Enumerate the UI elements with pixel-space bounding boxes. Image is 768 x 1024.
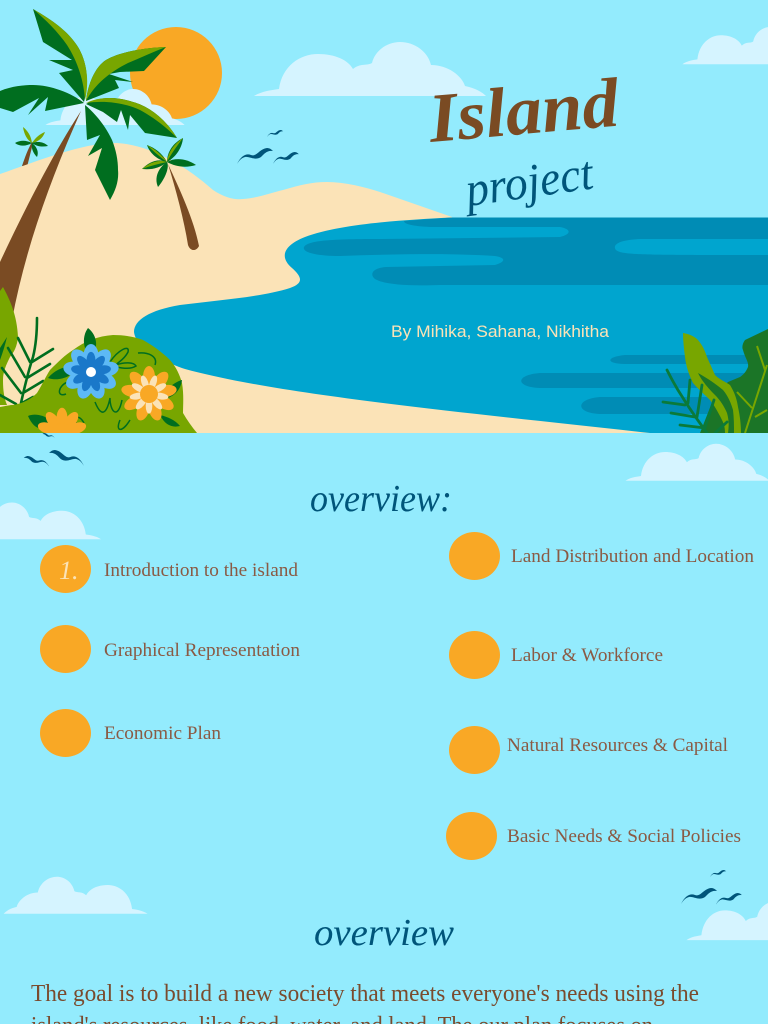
trunk xyxy=(0,111,81,320)
frond: upper right xyxy=(86,47,166,101)
cloud: behind palm xyxy=(45,89,185,125)
paragraph xyxy=(31,981,699,1024)
item 7: Basic Needs & Social Policies xyxy=(507,827,741,847)
item 4: Land Distribution and Location xyxy=(511,547,754,567)
item 1 xyxy=(40,545,299,593)
icon: sun xyxy=(130,27,222,119)
icon: palm tree, back xyxy=(142,138,199,250)
sand xyxy=(0,143,452,300)
water: lower dark strips xyxy=(521,355,768,414)
frond: top xyxy=(33,9,87,102)
cloud: top centre xyxy=(254,42,486,96)
item 3 xyxy=(40,709,221,757)
bush: line doodles xyxy=(59,348,156,429)
item 5: Labor & Workforce xyxy=(511,646,663,666)
plants: right fern xyxy=(663,370,727,433)
list: left column xyxy=(40,545,300,757)
panel: hero beach scene xyxy=(0,9,768,443)
frond: down xyxy=(85,105,118,200)
item 4 xyxy=(449,532,754,580)
frond: left xyxy=(0,85,84,115)
item 1: 1. xyxy=(59,556,78,585)
plants: right leaf inner xyxy=(698,373,734,433)
water: dark bands xyxy=(304,218,768,285)
paragraph: The goal is to build a new society that meets everyone's needs using the xyxy=(31,981,699,1007)
item 2: Graphical Representation xyxy=(104,641,300,661)
title: Island: Island xyxy=(425,65,623,158)
plants: right large leaf xyxy=(700,329,768,433)
small palm: far left xyxy=(15,127,48,167)
water: light strip xyxy=(615,239,768,255)
item 7 xyxy=(446,812,741,860)
plants: right lime leaf xyxy=(683,333,741,433)
plants: left lime leaf xyxy=(0,287,18,405)
authors: By Mihika, Sahana, Nikhitha xyxy=(391,323,610,341)
list: right column xyxy=(446,532,754,860)
heading: overview second: overview xyxy=(314,912,455,954)
cloud: overview right xyxy=(625,444,768,481)
item 6: Natural Resources & Capital xyxy=(507,736,728,756)
item 1: Introduction to the island xyxy=(104,561,299,581)
item 6 xyxy=(449,726,728,774)
frond: right xyxy=(86,98,177,138)
plants: right leaf veins xyxy=(737,346,767,433)
item 2 xyxy=(40,625,300,673)
subtitle: project: project xyxy=(459,146,598,217)
bush: dark leaves xyxy=(28,328,182,428)
icon: blue flower xyxy=(62,344,120,401)
icon: orange flower, lower xyxy=(38,408,86,433)
icon: birds xyxy=(237,130,299,164)
plants: left fern xyxy=(0,318,53,404)
plants: left leaf vein xyxy=(0,337,7,360)
item 5 xyxy=(449,631,663,679)
icon: birds, lower right xyxy=(681,870,742,905)
item 3: Economic Plan xyxy=(104,724,221,744)
water xyxy=(134,218,768,433)
cloud: top right xyxy=(682,27,768,64)
cloud: overview left xyxy=(0,503,101,539)
bush xyxy=(0,328,197,443)
icon: birds, overview section xyxy=(24,433,84,466)
icon: palm tree, front xyxy=(0,9,177,320)
icon: orange flower xyxy=(120,366,178,422)
cloud: lower right xyxy=(686,902,768,940)
cloud: lower left xyxy=(4,877,148,914)
heading: overview: overview: xyxy=(310,478,452,520)
